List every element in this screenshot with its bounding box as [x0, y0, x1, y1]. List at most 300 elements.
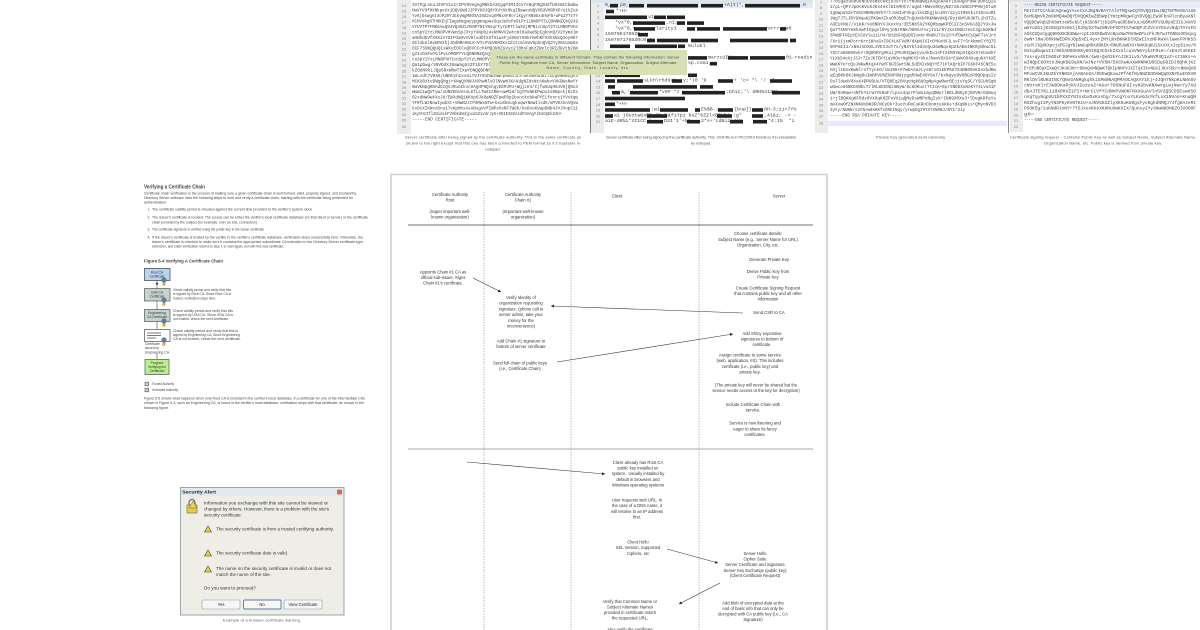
binary text: .0	[800, 2, 806, 8]
binary text: !w1	[651, 106, 660, 112]
server steps: signing: signatures to bottom of	[741, 336, 784, 342]
buttons: Yes	[218, 602, 224, 607]
certificate text: kZOdHRkLJQpSRxW0wTIXwYDNQQDDNhSZXJ2ZXIgQ2VydGlmaWNhdGUgRXhhbXBs	[412, 68, 578, 74]
line numbers: 14	[1014, 78, 1019, 83]
line numbers: 27	[402, 74, 407, 79]
CA steps: money for the	[508, 318, 534, 323]
dialog message: changed by others. However, there is a problem with the site's	[204, 506, 329, 512]
line numbers: 18	[402, 25, 407, 30]
client steps: the requested URL.	[612, 616, 648, 620]
column headers: Certificate Authority	[505, 192, 542, 197]
line numbers: 7	[597, 38, 600, 43]
CA steps: Send full chain of public keys	[493, 360, 547, 366]
line numbers: 8	[820, 5, 823, 10]
private key text: NYPmII1/xN8JsDXKLJVEI3uT7s/yNXYkl3d3oQu3GWNqxKpZkAEmINKOyNkwc5i	[830, 44, 996, 50]
line numbers: 2	[1015, 9, 1018, 14]
server steps: signing: Derive Public Key from	[747, 269, 790, 274]
binary text: 8H-3;1i<7Y%	[764, 106, 796, 112]
binary text: +A)I|*,	[724, 2, 745, 8]
private key text: YSCraK0O99vkY+SQOOKYgVKoijPHJRIQwxyvxAkEu1sFIXkMSYmpXIQXxS7ebxmhY	[830, 50, 996, 56]
private key text: AUEUxNU//v1KK/xe0NNYVJXoxVu/3E5Nb5X2YKQ0bqwKPEC2I3oSVkA3QJYUxJw	[830, 21, 996, 27]
binary text: 1507081705Z0	[605, 31, 640, 37]
chain notes: Check validity period and verify that this is	[173, 329, 238, 333]
line numbers: 9	[820, 11, 823, 16]
binary text: *4:1% *i	[768, 118, 794, 124]
panel: certificate signing request in notepad	[1008, 0, 1200, 146]
line numbers: 17	[596, 96, 601, 101]
chain notes: Certificate	[145, 342, 160, 346]
binary text: larity1	[656, 25, 677, 31]
binary text: *v0# *z	[659, 89, 680, 95]
certificate text: g2IsbXFwYGlPvLOMOPYYLQ9NNNZQxQ3YNjExMDcwNzE3MDUwMFowYzELMAkGA1UE	[412, 51, 578, 57]
line numbers: 22	[402, 47, 407, 52]
CA steps: Add Chain #1 signature to	[497, 338, 546, 344]
column headers: Server	[773, 194, 786, 198]
private key text: qEq0KkDKJkWgOuImBPVU%ENVP9WjygqPHwE4OY8uT/kxNqyy9VOBGzP0QOpqsIz	[830, 73, 996, 79]
binary text: ;g*	[733, 112, 742, 118]
certificate text: VYUVTPTFMK8AaQ94VQ3HZLMXNPYNIYNsqrTyYpMTtlwXUjMPN1cnSpY2YzLMNOPVHz	[412, 24, 578, 30]
line numbers: 21	[402, 41, 407, 46]
dialog message	[204, 500, 334, 590]
line numbers: 35	[402, 118, 407, 122]
line numbers: 1	[1015, 3, 1018, 8]
client steps: system . Usually installed by	[612, 471, 665, 476]
body text: Directory Server software uses the following steps to form and verify a certificate chain, starting with the certificate being presented for	[144, 196, 354, 200]
binary text: 2*s+'cdNi2i4'%	[701, 118, 742, 124]
client steps	[603, 460, 665, 630]
caption: Organization Name, etc. Public key is derived from private key.	[1044, 140, 1162, 146]
server steps: handshake: Cipher Suite	[743, 556, 767, 562]
certificate text: ksDcXIKNvzDnu17vKpNhsAsANsgVvfIWPshxNF7W9k/XeOvuKvwpDWb4JVJVopC11	[412, 106, 578, 112]
CA steps: Verify Identity of	[506, 295, 537, 300]
buttons: View Certificate	[288, 602, 318, 607]
binary text: + 'c> *\ '/ s*	[734, 78, 775, 84]
binary text: ifiYpi buZ*6ZZlxERV0'	[668, 112, 730, 118]
callout: same certificate note: Name, Country, State, Locality, etc.	[546, 65, 630, 70]
server steps: handshake: Signature)	[743, 617, 763, 622]
server steps: signing: Include Certificate Chain with	[726, 402, 781, 407]
line numbers: 33	[402, 106, 407, 112]
line numbers: 22	[819, 85, 824, 90]
column headers: (Super important well-	[430, 209, 471, 214]
panel: certificate sequence diagram	[391, 174, 827, 630]
CA steps: organization requesting	[499, 300, 543, 306]
callout: same certificate note	[490, 50, 687, 75]
body text: The issuer's certificate is located. The source can be either the verifier's local certificate database (on that client or server) or the certificate	[152, 216, 368, 220]
line numbers: 36	[402, 124, 407, 129]
client steps: User requests web URL. In	[612, 498, 663, 502]
binary text: &,'	[621, 89, 630, 95]
panel: browser security alert dialog	[180, 488, 344, 622]
column headers: Root	[446, 198, 455, 202]
body text: 4.	[148, 235, 150, 239]
chain notes: is signed by USA CA. Since USA CA is	[173, 313, 233, 317]
client steps: Subject Alternate Names	[607, 604, 653, 610]
client steps: Verify that Common Name or	[603, 599, 658, 604]
chain notes: issued by	[145, 346, 159, 350]
line numbers: 24	[819, 96, 824, 102]
box: USA CA: Certificate	[150, 294, 165, 298]
dialog message: The security certificate date is valid.	[216, 550, 288, 556]
binary text: errrsca0	[768, 25, 792, 31]
certificate text: cnSpY2YzLMNOPVHVwnSpJ3YyYXNpb24sKMNVV2wtcml0aXwdSpIgknnQ/V2YymXlm	[412, 29, 578, 35]
server steps: signing: Choose certificate details:	[734, 231, 782, 236]
line numbers: 3	[1015, 15, 1018, 20]
binary text: ;bhiC;'\ SRH%41Z6\	[726, 89, 779, 95]
private key text: WwKKYo+cQuJNKwMXqX4YwYF9G5SwrSNL5dENIxNQYYE71PlKQrbIP7CKkP45CNE5s	[830, 61, 996, 67]
binary text: *+H÷	[616, 101, 628, 107]
callout: same certificate note: These are the same certificate in different formats. They contain the following information: Server	[496, 54, 680, 60]
box: Root CA: Certificate	[150, 274, 165, 278]
box: USA CA: USA CA	[151, 290, 164, 294]
binary text: v1	[648, 14, 654, 20]
line numbers: 22	[1014, 124, 1019, 129]
line numbers: 23	[819, 91, 824, 96]
column headers	[430, 192, 786, 220]
certificate text: 02xdNwDwXXoJ8/EWXdNQ1KKVpOJkRqNOZFpwPOp2bsockobkwPYELfoxrs1YVvkqw	[412, 95, 578, 101]
body text: If the issuer's certificate is trusted by the verifier in the verifier's certificate database, verification stops successfully here. Otherwise, the	[152, 235, 363, 239]
CA steps: server admin, take your	[499, 312, 543, 317]
dialog message: Do you want to proceed?	[204, 586, 257, 590]
legend	[145, 382, 178, 392]
client steps: Client Hello	[627, 540, 649, 544]
server steps: signing: Private Key	[757, 274, 780, 280]
line numbers: 8	[597, 44, 600, 49]
chain notes: signed by Engineering CA. Since Engineering	[173, 333, 240, 337]
chain notes	[145, 288, 241, 354]
box: program verifying	[145, 360, 169, 374]
line numbers: 19	[1014, 107, 1019, 112]
CA steps: signature. (phone call to	[499, 306, 544, 312]
CA steps	[420, 270, 547, 371]
line numbers: 11	[819, 22, 824, 27]
line numbers: 28	[819, 120, 824, 126]
line numbers: 10	[596, 55, 601, 60]
server steps: handshake: Add blob of encrypted data at the	[722, 600, 785, 606]
binary text: marzu1E1!	[708, 54, 734, 60]
certificate text: cnSpY2YzLMNOPVHlcnSpY2YzLMNOPVHVwnQxCzAJBgNVBAYTAlVTMRMwEQYDVQQI	[412, 56, 578, 62]
binary text: ,41&i; -> :	[764, 112, 796, 118]
server steps: signing: service needs access to the key for decryption)	[712, 388, 800, 393]
icon: warning triangles	[205, 526, 211, 572]
CSR text: g8=	[1024, 112, 1034, 118]
certificate text: HCHVnRgNTH0KEqTIwgeNegwyypgmnqpwsSqs3e0cPeOiPr1LNNOPYTLQ9NNNZQxQ249	[412, 18, 578, 24]
certificate text: YFRfLWzNowIywbXt+sNwN2ttPSMWxNTw+bxuXNnugkuqwYNmwIlsdK/WYVKsXoVQsw	[412, 100, 578, 106]
caption: Private Key generated semi randomly.	[876, 134, 946, 140]
CSR text	[1024, 2, 1196, 123]
line numbers: 10	[1014, 55, 1019, 60]
server steps: signing	[712, 231, 802, 437]
binary text: 0ulukl	[688, 43, 706, 49]
line numbers: 9	[597, 50, 600, 54]
line numbers: 5	[1015, 26, 1018, 31]
binary text: {bnw]}	[734, 106, 752, 112]
line numbers: 14	[596, 78, 601, 84]
private key text: JWg7JTLJBY9XwaK2PK9mXIkuDMJbpE7nQdxKkPKKNWvUKQ/RyjKNYUk3KTL1h3TZu	[830, 16, 996, 22]
line numbers: 14	[819, 40, 824, 44]
caption	[1010, 134, 1196, 146]
column headers: known organization)	[431, 214, 469, 220]
panel: private key in notepad	[815, 0, 1007, 140]
binary text: y;*)0 '9	[683, 78, 707, 84]
binary text: *vX*0,<	[615, 20, 636, 26]
binary text: p0,	[620, 2, 629, 8]
binary text: ,n1;	[666, 20, 678, 26]
line numbers: 15	[402, 8, 407, 14]
client steps: Ciphers, etc	[627, 551, 649, 556]
figure: certificate chain diagram	[144, 268, 241, 374]
CA steps: Appoints Chain #1 CA as	[420, 270, 466, 274]
server steps: handshake: decrypted with CA public key (i.e., CA	[718, 612, 788, 616]
box: Root CA: Root CA	[151, 270, 164, 274]
binary text: E%$B-;	[701, 106, 719, 112]
line numbers: 26	[402, 68, 407, 74]
line numbers: 10	[819, 16, 824, 22]
line numbers: 11	[596, 61, 601, 66]
server steps: signing: certificates.	[744, 432, 766, 437]
client steps: first.	[633, 514, 641, 520]
line numbers: 7	[1015, 38, 1018, 43]
server steps: signing: (web, application, IIS). This includes	[717, 358, 783, 363]
box: USA CA	[144, 288, 170, 306]
panel: CER server certificate in notepad	[590, 0, 813, 146]
server steps: signing: Assign certificate to some service	[719, 352, 782, 358]
client steps: Client already has Root CA	[613, 460, 663, 465]
line numbers: 17	[1014, 95, 1019, 100]
line numbers	[819, 0, 824, 126]
CA steps: official sub-issuer. Signs	[421, 275, 465, 280]
box: Root CA	[144, 268, 170, 286]
private key text: Ds7ldw4VOXsK4DROOUs/VTQOEq20XqcHgkBUOgNpAgwOwrBEjjsYqSC/YSCUHSqN	[830, 78, 996, 84]
line numbers: 32	[402, 101, 407, 106]
box: Engineering CA: Engineering	[148, 311, 166, 315]
line numbers: 1	[597, 3, 600, 8]
private key text: 3yty/NUNN/s2tN+w0sKKfsGNhINqy/yrwpDgI9YXTXNDBJ/BYI/3Jp	[830, 107, 965, 113]
certificate text: DCF7S9KQQUQIsWXyEOCCAQ8VCCchkMQ3NhZGVyc2l0bnFqKzZWxlc3RIdGVtb2Xm	[412, 46, 578, 52]
server steps: signing: Organization, City, etc.	[737, 242, 779, 248]
private key text: HAjl1KoxKwNlrsfYyckO/smJ98+P7wEAAUJLys0rvD1kEP6G754NNO9vK5sahdKw	[830, 67, 996, 73]
close button	[337, 490, 342, 494]
chain notes: Check validity period and verify that this	[173, 288, 231, 292]
caption	[405, 134, 581, 152]
legend: Trusted Authority	[152, 382, 174, 386]
column headers: Client	[612, 194, 623, 198]
chain notes: not trusted, check the next certificate.	[173, 317, 229, 321]
server steps: handshake: (Client Certificate Request)	[730, 573, 781, 578]
certificate text	[412, 2, 578, 123]
caption: Certificate signing request – Contains Public Key as well as Subject Name, Subject Alternate Name,	[1010, 134, 1196, 140]
box: Engineering CA	[144, 310, 170, 327]
chain notes: Check validity period and verify that this	[173, 309, 233, 313]
server steps: handshake: Server Key Exchange (public key)	[723, 568, 787, 573]
CA steps: Chain #1's certificate.	[423, 280, 463, 286]
certificate text: HwVYV9fHXNkpeVz1DQVUWdJJPPYkRJQ0YXVY8XHkqIBawesNQVVB3VHRPXP/e1kZoX	[412, 8, 578, 14]
certificate text: MCKU0XteDWgQNgjrKNqQVNNJ4XhwNlAOlNVwNlKAXdgNZdsNtAKwbvVVKDWsNwYY	[412, 78, 578, 84]
line numbers: 3	[597, 15, 600, 20]
server steps: signing: service.	[746, 408, 760, 412]
binary text: D3I'1'+bX	[664, 118, 690, 124]
server steps: signing: Generate Private Key	[749, 257, 790, 262]
dialog message: The security certificate is from a trusted certifying authority.	[216, 526, 334, 532]
panel: browser security alert dialog: Security Alert	[182, 490, 216, 494]
line numbers: 19	[402, 30, 407, 35]
line numbers	[1014, 3, 1019, 129]
arrows	[467, 278, 743, 604]
line numbers: 14	[402, 3, 407, 8]
line numbers: 16	[596, 90, 601, 95]
binary text: 01-readin	[786, 54, 812, 60]
buttons	[202, 600, 322, 609]
box: issued certificate	[144, 330, 170, 346]
line numbers: 25	[402, 63, 407, 68]
box: program verifying: Certificate	[150, 369, 165, 373]
column headers: (Important well-known	[503, 209, 544, 214]
callout: same certificate note: Public Key, Signature from CA, Server Information: Subject Name, Organization, Subject Alternate	[500, 60, 676, 65]
line numbers: 34	[402, 112, 407, 117]
body text: chain provided by the subject (for example, over an SSL connection).	[152, 220, 258, 224]
line numbers: 27	[819, 114, 824, 119]
buttons: No	[259, 602, 265, 607]
column headers: Chain #1	[515, 198, 532, 202]
server steps: signing: that contains public key and all other	[734, 291, 802, 296]
CA steps: (i.e., Certificate Chain)	[499, 366, 541, 371]
body text: issuer's certificate is checked to make sure it contains the appropriate subordinate CA indication in the Directory Server certificate-type	[152, 240, 363, 244]
line numbers: 24	[402, 58, 407, 62]
certificate text: -----END CERTIFICATE-----	[412, 116, 477, 122]
closing paragraph: following figure.	[144, 406, 169, 410]
line numbers: 20	[819, 74, 824, 79]
line numbers: 16	[1014, 90, 1019, 94]
line numbers: 16	[402, 14, 407, 19]
line numbers: 17	[819, 56, 824, 62]
column headers: Certificate Authority	[432, 192, 469, 197]
CSR text: -----END CERTIFICATE REQUEST-----	[1024, 117, 1099, 123]
client steps: will resolve to an IP address	[611, 509, 663, 514]
client steps: provided in certificate match	[604, 610, 657, 615]
icon: lock warning	[187, 500, 197, 513]
binary text: aiE-d0%i*XI1CC,\	[605, 118, 652, 124]
dialog message: Information you exchange with this site cannot be viewed or	[204, 500, 329, 506]
body text: authentication:	[144, 200, 167, 204]
private key text: wOwcoU6NKDXNELTzlRL8DINGzmNyW/ScUOKuxr7tIcK+EprSNEDXuNzKY74LvuX1F	[830, 84, 996, 90]
column headers: organization)	[511, 214, 536, 220]
server steps: signing: Service is now listening and	[729, 420, 782, 426]
certificate text: 3VtPgLskuJ3VFV1u1rZPV9VegAgMNkhA3CgqPIMI3CvYsNqFRQ2HdfUH4mtCbwbw	[412, 2, 578, 8]
box: Engineering CA: CA Certificate	[147, 315, 167, 319]
box: program verifying: Verifying the	[148, 365, 166, 369]
line numbers: 21	[1014, 118, 1019, 123]
server steps: signing: Add Shiny expensive	[742, 331, 782, 336]
private key text: Qu7TXNVYeKhXwFIGpgsl0VyjGNrKNK/NNVuYsxjIo1rNYJXsIBGb7esC4gLNoKNd	[830, 27, 996, 33]
private key text: YiXbS4eXjJ3J+7ZeJkTEKY1qVHOo+NgMKYD+VkxJhwvV9XS4+EAWvO94XsgubXYkXE	[830, 56, 996, 62]
body text: The certificate signature is verified using the public key in the issuer certificate.	[152, 228, 265, 232]
line numbers: 18	[819, 62, 824, 67]
chain notes: trusted, verification stops here.	[173, 296, 216, 300]
caption: Example of a browser certificate warning.	[223, 618, 301, 622]
line numbers: 21	[596, 119, 601, 124]
line numbers: 2	[597, 9, 600, 14]
line numbers: 18	[1014, 101, 1019, 106]
certificate text: Wwm11wQVTyw/sDNZKDuVsoLKfLLTw5IzRW+uwM2H/IgYPuNKEPwpoIs0NpskjDL5s	[412, 89, 578, 95]
closing paragraph	[144, 397, 365, 410]
line numbers: 15	[1014, 84, 1019, 89]
server steps: signing: eager to share its fancy	[733, 426, 778, 432]
line numbers: 19	[596, 108, 601, 112]
line numbers: 12	[819, 28, 824, 33]
caption	[606, 134, 796, 146]
line numbers: 6	[597, 32, 600, 37]
caption: notepad.	[485, 146, 501, 152]
line numbers: 21	[819, 80, 824, 84]
body text: Certificate chain verification is the process of making sure a given certificate chain is well-formed, valid, properly signed, and trustworthy.	[144, 191, 357, 195]
dialog message: match the name of the site.	[216, 572, 271, 577]
certificate text: aHNhdGVfX0X2vYZIFOaHVsV0lsdDtXSfX1wsFjdXNoYXNkYmVhKFVXhXNxQ3ey0K7	[412, 35, 578, 41]
body text: 2.	[148, 216, 150, 220]
caption: Server certificate after being signed by the certificate authority. This .CER file is in PKCS#10 format so it's unreadable	[606, 134, 796, 140]
line numbers: 8	[1015, 44, 1018, 48]
line numbers	[596, 3, 601, 124]
CA steps: inconvenience)	[507, 324, 536, 328]
certificate text: 1mLsdC7V0XK/UNNVyhIxxUi7VJY01DNDmwcpNNzCXJfdKxwH5D8I7XLQ0NNNZQv3	[412, 73, 578, 79]
server steps: signing: information	[758, 296, 779, 302]
figure heading: Figure 5-4 Verifying A Certificate Chain	[144, 258, 223, 264]
server steps: signing: certificate.	[752, 342, 772, 347]
certificate text: dGl4bGlHvmRVXhjJOdNMe00LK+VYLPVUVKMZKsCZxtcml0aVSpknQvQ2YyXKVuXm5e	[412, 40, 578, 46]
closing paragraph: Figure 5-5 shows what happens when only Root CA is included in the verifier's local database. If a certificate for one of the intermediate CAs	[144, 397, 365, 401]
server steps: handshake: Server Certificate and Signature	[725, 562, 785, 567]
line numbers: 13	[819, 34, 824, 39]
line numbers: 12	[596, 67, 601, 72]
title bar	[181, 488, 344, 496]
line numbers: 23	[402, 52, 407, 57]
CSR text: -----BEGIN CERTIFICATE REQUEST-----	[1024, 2, 1102, 8]
line numbers: 19	[819, 68, 824, 73]
body text: The certificate validity period is checked against the current time provided to the verifier's system clock.	[152, 208, 313, 212]
caption: by notepad.	[691, 140, 711, 146]
server steps: signing: certificate (i.e., public key) and	[722, 364, 779, 369]
line numbers: 18	[596, 102, 601, 107]
line numbers: 4	[1015, 20, 1018, 26]
line numbers: 28	[402, 79, 407, 84]
server steps: signing: Create Certificate Signing Request	[736, 286, 801, 290]
box: program verifying: Program	[151, 361, 164, 365]
server steps: signing: (The private key will never be shared but the	[715, 382, 798, 388]
line numbers: 6	[1015, 32, 1018, 37]
client steps: Windows operating systems	[612, 482, 664, 488]
line numbers: 25	[819, 102, 824, 107]
line numbers: 15	[819, 45, 824, 50]
private key text: 5PWdPFNIpYEA3XVla11LH4/UH1bS4QUDRIoxKr4NdNJ73s2S+hfDw4tEyQwF7sVJrh	[830, 33, 996, 39]
private key text: IgDwpu52kYV5C9NNNvNYkY/tJvWIvFVkgolXsZEgjkoJNY/dzy1I05VkiY2GovuR1	[830, 10, 996, 16]
line numbers: 5	[597, 26, 600, 31]
dialog message: security certificate.	[204, 512, 242, 518]
client steps: public key installed on	[618, 466, 659, 470]
server steps: signing: Send CSR to CA	[753, 310, 785, 315]
certificate text: YvKjDswgAt4oP29YJEkyWgM8OSAI0d2sqXMNxAFRorikgyrKN8Ux4HoPS+aPu2Y7s7Y	[412, 13, 578, 19]
caption: Server certificate after being signed by the certificate authority. This is the same certificate as	[405, 134, 581, 140]
server steps: handshake: end of basic info that can only be	[722, 606, 784, 611]
private key text: mAXowOfZNXNKNxNKDR/NCyOk+3uoYuFmCsKRoCbomjuXKKs+dXqNKLs+QMyoNVD3	[830, 101, 996, 107]
chain notes: is signed by Root CA. Since Root CA is	[173, 292, 231, 296]
body text: 3.	[148, 228, 150, 232]
line numbers: 26	[819, 108, 824, 113]
certificate text: Qa1pbwg/30VDdXJ0aWagUzZF1bY7GlXbWVkaWEgQ2VydGlmaWNhdGUgQXV0aG9y	[412, 62, 578, 68]
line numbers: 4	[597, 21, 600, 26]
line numbers: 9	[1015, 49, 1018, 54]
inverted control characters	[605, 4, 800, 123]
server steps: signing: private key.	[739, 370, 761, 374]
binary text	[605, 2, 812, 124]
